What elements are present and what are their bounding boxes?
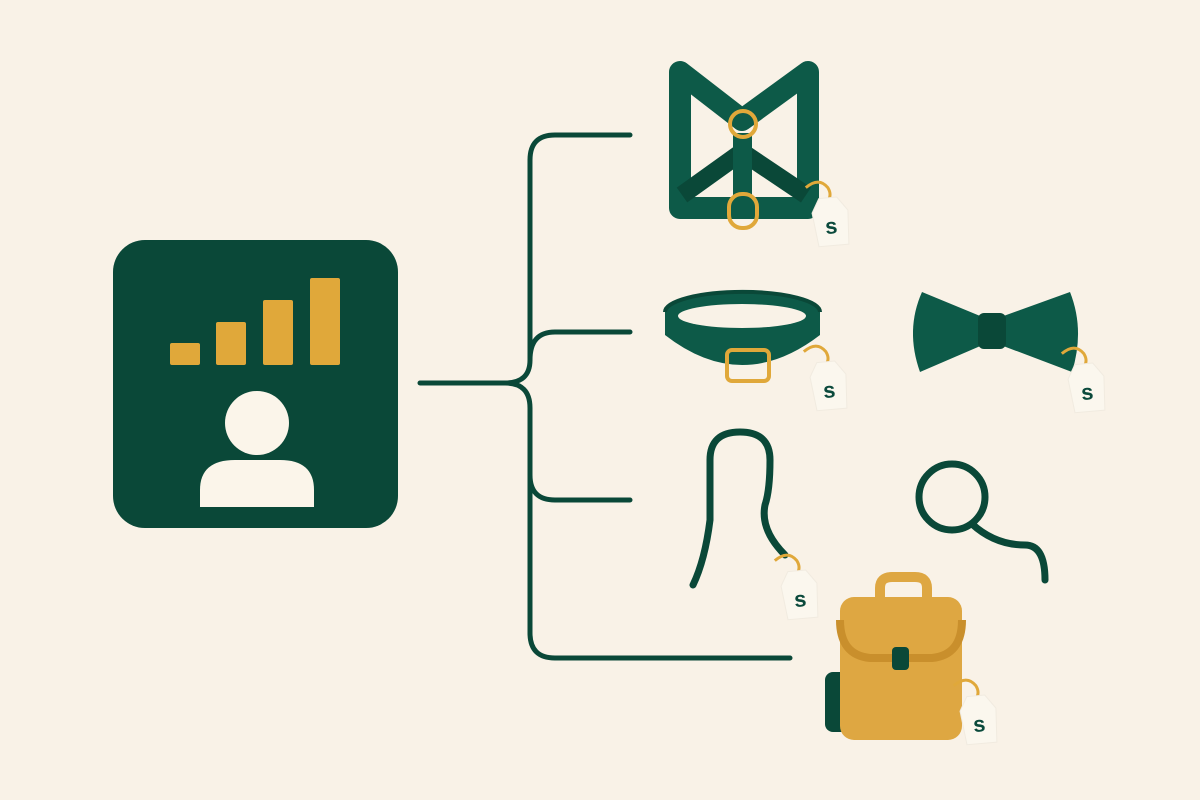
- icon: lasso rope: [919, 464, 1045, 580]
- icon: bow tie: [913, 292, 1107, 413]
- icon: harness: [680, 72, 851, 247]
- icon: leash: [693, 432, 820, 620]
- icon: backpack: [825, 577, 999, 745]
- connector: branching bracket: [420, 135, 790, 658]
- icon: person: [200, 391, 314, 507]
- icon: collar: [665, 292, 849, 411]
- bar chart: [170, 278, 340, 365]
- panel: analytics user card: [113, 240, 398, 528]
